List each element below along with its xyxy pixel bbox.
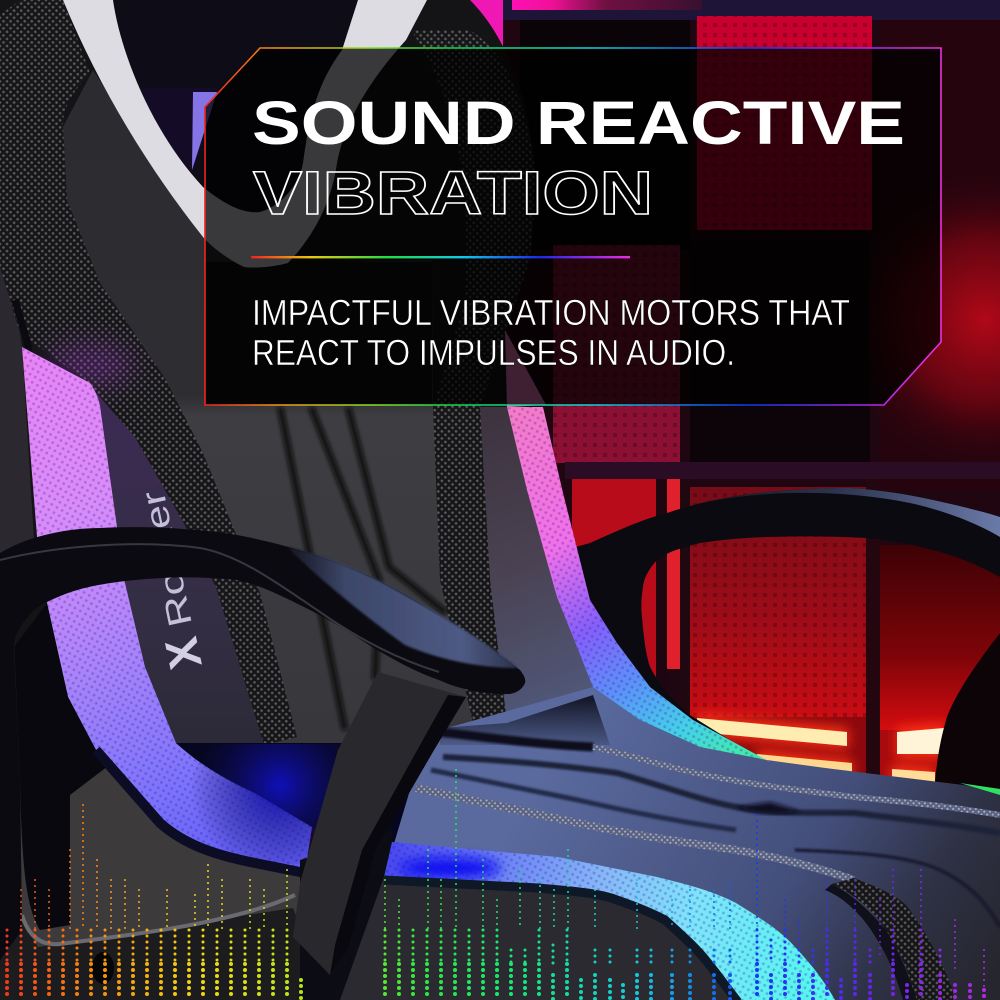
left leather edge: [0, 267, 34, 553]
heading: vibration outlined: VIBRATION: [253, 159, 653, 227]
chair: backrest: [0, 0, 640, 760]
chair: lower side panel: [0, 603, 340, 1000]
headrest dark: [113, 0, 360, 212]
rainbow divider: [251, 256, 630, 258]
seat mesh band right: [832, 878, 956, 1000]
seat ribs shading: [431, 732, 1000, 927]
heading: sound reactive: SOUND REACTIVE: [252, 89, 905, 157]
chair: right armrest: [560, 488, 1000, 765]
chair: left armrest and post: [0, 527, 525, 975]
sound wave dots: large lower segments: [7, 964, 984, 1000]
seat piping upper: [593, 747, 1000, 815]
shaded dark corner: [736, 802, 800, 814]
arm pad blue highlight: [287, 547, 518, 668]
blue glow: [190, 744, 380, 864]
mesh band right bottom: [433, 407, 507, 723]
left frame black line: [15, 300, 40, 540]
blue shadow under backrest: [176, 743, 470, 860]
seat green edge line: [960, 783, 1000, 795]
panel contour: [22, 895, 295, 944]
LED strip: lower seat: [384, 842, 835, 1000]
mesh band right top: [411, 30, 534, 407]
dark band beside frame: [14, 603, 112, 930]
body text: IMPACTFUL VIBRATION MOTORS THAT: [252, 292, 850, 333]
panel background with chamfered corners: [205, 48, 941, 405]
LED dark edge: [96, 750, 305, 873]
arm pad grey edge line: [0, 544, 439, 672]
body text: [252, 292, 850, 373]
rainbow panel border: [205, 48, 941, 405]
screw holes: [92, 952, 114, 984]
body text: REACT TO IMPULSES IN AUDIO.: [252, 332, 735, 373]
faint top part below panel: [505, 330, 546, 407]
seat mesh band dark edge: [825, 884, 917, 1000]
seat piping lower: [416, 788, 854, 880]
LED strip: upper left: [22, 347, 312, 873]
headrest white band: [63, 0, 427, 268]
neon light bars: [697, 714, 945, 786]
chair: gap behind arm post: [300, 830, 400, 1000]
sound wave dots: medium middle segments: [7, 930, 940, 964]
seat top shadow: [440, 695, 610, 745]
logo leather strip: [85, 380, 264, 745]
upper backrest pad: [63, 70, 505, 745]
LED strip: right side of backrest: [505, 330, 770, 762]
backrest logo text: Rocker: [134, 488, 199, 630]
backrest centre stitching: [280, 407, 446, 730]
backrest logo text: [134, 488, 212, 674]
panel zone darkening of pad: [205, 262, 432, 405]
backrest side bolster: [478, 407, 640, 725]
mesh band left: [0, 0, 297, 745]
hot blue spot: [400, 858, 500, 878]
headrest purple gap: [135, 88, 218, 172]
text panel: [205, 48, 941, 405]
LED dark lower edge: [384, 880, 738, 1000]
chair: seat: [384, 687, 1000, 1000]
headrest lavender sliver: [192, 92, 217, 170]
arm pad: [0, 527, 525, 960]
arm post: [293, 672, 466, 975]
purple reflection on mesh: [45, 343, 135, 387]
sound wave dots: thin upper segments: [21, 770, 984, 990]
chair: seat lower dark cushion: [340, 877, 740, 1000]
chair: dark shape at right: [935, 633, 1000, 788]
backrest logo text: X: [154, 633, 212, 674]
